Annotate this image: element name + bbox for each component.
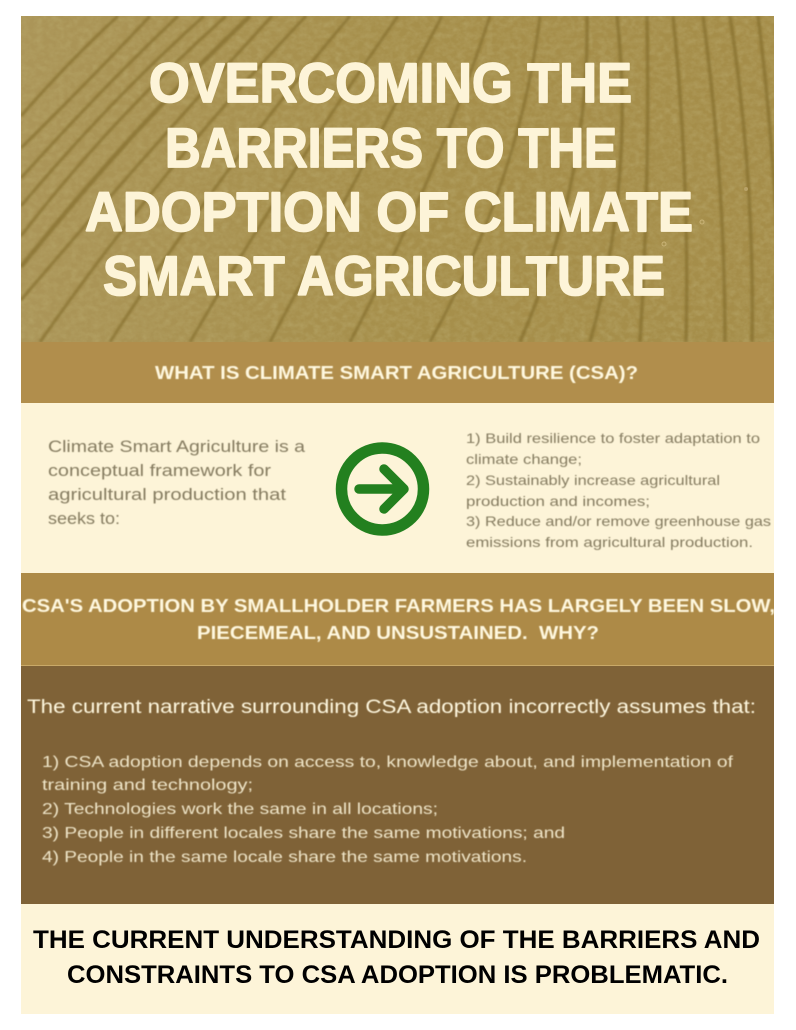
text: definition intro: agricultural production that bbox=[48, 486, 287, 504]
text: conclusion statement: CONSTRAINTS TO CSA ADOPTION IS PROBLEMATIC. bbox=[67, 961, 728, 989]
heading: slow adoption bbox=[22, 596, 775, 643]
text: conclusion statement bbox=[33, 926, 760, 989]
text: three CSA goals: 1) Build resilience to foster adaptation to bbox=[466, 430, 760, 446]
heading: what is CSA: WHAT IS CLIMATE SMART AGRICULTURE (CSA)? bbox=[155, 363, 638, 383]
icon: green arrow in circle bbox=[342, 448, 424, 530]
text: narrative assumptions list bbox=[42, 754, 734, 866]
text: narrative assumptions list: 2) Technologies work the same in all locations; bbox=[42, 801, 438, 818]
text: three CSA goals: production and incomes; bbox=[466, 493, 650, 509]
heading: slow adoption: CSA'S ADOPTION BY SMALLHOLDER FARMERS HAS LARGELY BEEN SLOW, bbox=[22, 596, 775, 616]
text: three CSA goals: 2) Sustainably increase agricultural bbox=[466, 472, 720, 488]
text: narrative assumptions list: training and technology; bbox=[42, 777, 253, 794]
text: three CSA goals: emissions from agricultural production. bbox=[466, 534, 753, 550]
title: OVERCOMING THE bbox=[149, 51, 632, 114]
panel: CSA definition bbox=[21, 403, 774, 573]
text: narrative assumptions list: 3) People in different locales share the same motivations; and bbox=[42, 825, 565, 842]
text: definition intro: seeks to: bbox=[48, 510, 120, 528]
heading: slow adoption: PIECEMEAL, AND UNSUSTAINED. WHY? bbox=[197, 623, 599, 643]
title: ADOPTION OF CLIMATE bbox=[85, 180, 693, 243]
text: three CSA goals: climate change; bbox=[466, 451, 582, 467]
panel: slow adoption band bbox=[21, 573, 775, 665]
panel: current narrative bbox=[21, 665, 774, 904]
text: three CSA goals bbox=[466, 430, 771, 550]
title bbox=[85, 51, 693, 307]
panel: hero field photo bbox=[21, 16, 780, 342]
panel: conclusion bbox=[21, 904, 774, 1014]
text: definition intro: Climate Smart Agriculture is a bbox=[48, 438, 306, 456]
title: BARRIERS TO THE bbox=[165, 116, 617, 179]
panel: what is CSA heading band bbox=[21, 342, 774, 403]
text: definition intro: conceptual framework for bbox=[48, 462, 272, 480]
text: narrative assumptions list: 4) People in the same locale share the same motivations. bbox=[42, 849, 527, 866]
text: narrative assumptions list: 1) CSA adoption depends on access to, knowledge about, and implementation of bbox=[42, 754, 734, 771]
text: definition intro bbox=[48, 438, 306, 528]
text: conclusion statement: THE CURRENT UNDERSTANDING OF THE BARRIERS AND bbox=[33, 926, 760, 954]
text: narrative lead: The current narrative surrounding CSA adoption incorrectly assumes that: bbox=[27, 697, 756, 718]
text: three CSA goals: 3) Reduce and/or remove greenhouse gas bbox=[466, 513, 771, 529]
title: SMART AGRICULTURE bbox=[103, 244, 665, 307]
